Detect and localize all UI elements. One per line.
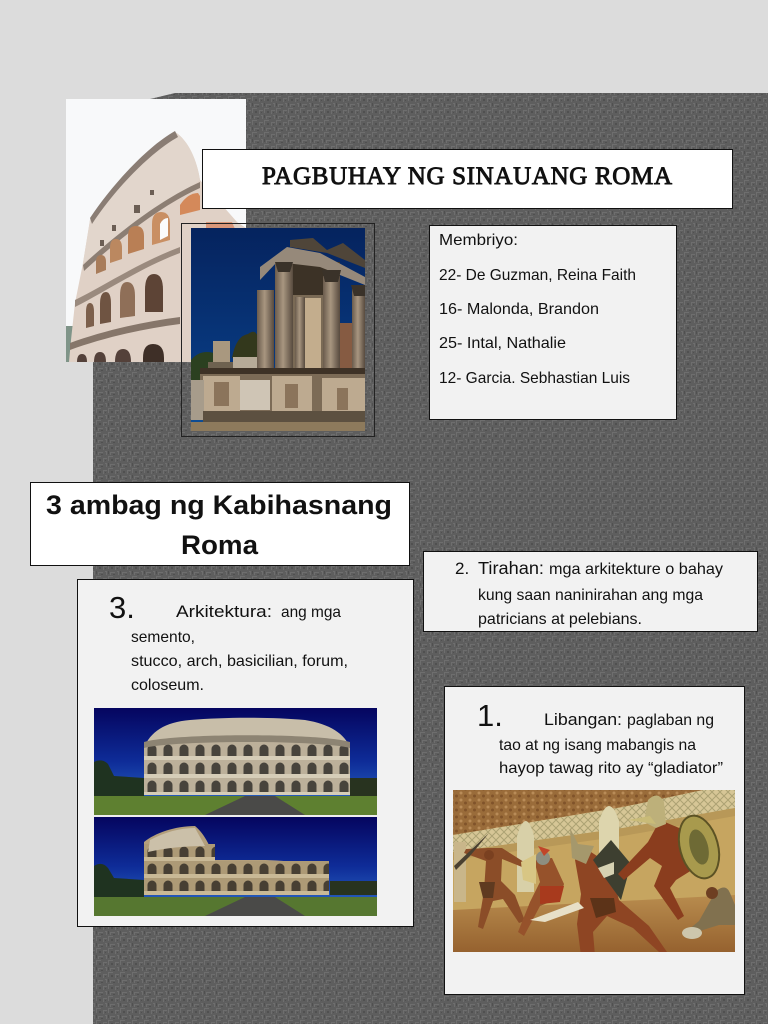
leaping gladiator right xyxy=(618,820,692,920)
gladiator left xyxy=(464,848,525,929)
image: gladiators in the arena xyxy=(453,790,735,956)
upper arches xyxy=(152,212,170,245)
panel: 3 Arkitektura: ang mga xyxy=(281,604,341,621)
panel: members list: Membriyo: xyxy=(439,232,518,249)
podium xyxy=(200,372,365,413)
panel: 2 Tirahan: Tirahan: xyxy=(478,558,544,578)
heading: 3 ambag xyxy=(30,482,410,566)
panel: 3 Arkitektura: coloseum. xyxy=(131,677,204,694)
cella wall xyxy=(293,295,323,375)
panel: 2 Tirahan: 2. xyxy=(455,559,469,578)
panel: 1 Libangan xyxy=(444,686,744,994)
lower arches xyxy=(143,344,164,362)
panel: 1 Libangan: tao at ng isang mabangis na xyxy=(499,737,696,754)
title: PAGBUHAY NG SINAUANG ROMA xyxy=(262,163,672,190)
panel: 2 Tirahan: mga arkitekture o bahay xyxy=(549,561,723,578)
panel: 3 Arkitektura: semento, xyxy=(131,629,195,646)
balustrade xyxy=(453,790,735,852)
dark interior xyxy=(293,262,340,295)
panel: members list: 22- De Guzman, Reina Faith xyxy=(439,267,636,284)
panel: 2 Tirahan xyxy=(424,552,758,632)
attic xyxy=(83,132,200,263)
title box xyxy=(202,150,732,208)
panel: 3 Arkitektura: Arkitektura: xyxy=(176,602,272,621)
panel: members list: 12- Garcia. Sebhastian Luis xyxy=(439,370,630,387)
trees xyxy=(191,352,213,380)
building mass xyxy=(69,132,246,362)
panel: 1 Libangan: paglaban ng xyxy=(627,712,714,729)
image: Temple of Vesta with frame xyxy=(182,224,374,436)
heading: 3 ambag: 3 ambag ng Kabihasnang xyxy=(46,490,392,520)
panel: members list: 25- Intal, Nathalie xyxy=(439,335,566,352)
image: Colosseum close-up xyxy=(66,99,246,362)
ground xyxy=(453,895,735,952)
panel: 1 Libangan: Libangan: xyxy=(544,710,622,729)
entablature xyxy=(260,247,365,285)
crowd xyxy=(453,790,703,835)
panel: 2 Tirahan: kung saan naninirahan ang mga xyxy=(478,587,703,604)
dark textured background panel xyxy=(93,93,768,1024)
middle arches xyxy=(145,274,163,312)
panel: 1 Libangan: hayop tawag rito ay “gladiator” xyxy=(499,760,723,777)
columns xyxy=(257,290,274,374)
panel: 3 Arkitektura xyxy=(78,580,414,926)
top colosseum xyxy=(94,760,144,797)
panel: members list: 16- Malonda, Brandon xyxy=(439,301,599,318)
panel: members list xyxy=(430,226,676,420)
image: Colosseum then and now xyxy=(94,708,377,916)
panel: 3 Arkitektura: 3. xyxy=(109,590,135,625)
bottom colosseum xyxy=(94,864,144,898)
panel: 3 Arkitektura: stucco, arch, basicilian, forum, xyxy=(131,653,348,670)
fallen man xyxy=(692,888,735,930)
gladiator 2 xyxy=(518,858,564,936)
panel: 1 Libangan: 1. xyxy=(477,698,503,733)
broken column and blocks xyxy=(213,341,230,363)
panel: 2 Tirahan: patricians at pelebians. xyxy=(478,611,642,628)
heading: 3 ambag: Roma xyxy=(181,530,258,560)
central gladiator xyxy=(575,848,667,956)
